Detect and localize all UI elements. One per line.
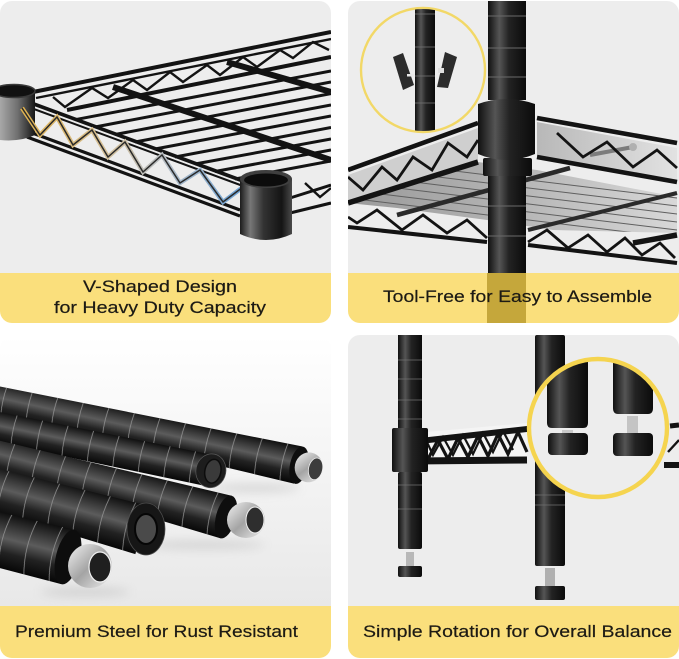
right post with foot <box>535 335 565 600</box>
caption band <box>0 606 331 658</box>
caption: tool-free: Tool-Free for Easy to Assemble <box>383 287 652 306</box>
caption band <box>348 273 679 323</box>
wire shelf grid <box>33 32 331 213</box>
caption: V-shaped design <box>54 277 267 317</box>
rod 1 <box>0 386 322 484</box>
rod 5 <box>0 513 82 584</box>
detail: collapsed foot <box>547 362 588 455</box>
right corner sleeve <box>240 170 292 240</box>
caption band <box>0 273 331 323</box>
caption band <box>348 606 679 658</box>
detail circle: adjustable feet <box>529 350 667 497</box>
caption: premium steel: Premium Steel for Rust Resistant <box>15 622 298 641</box>
left post with foot <box>392 335 428 577</box>
panel: V-shaped design <box>0 1 331 323</box>
front rails <box>23 100 243 216</box>
caption: simple rotation: Simple Rotation for Overall Balance <box>363 622 672 641</box>
highlighted V-shaped zigzag wire <box>22 108 243 202</box>
rod 3 <box>0 440 237 538</box>
post showing through the caption band <box>487 273 526 323</box>
panel: premium steel <box>0 386 331 658</box>
left corner sleeve <box>0 84 35 140</box>
detail circle: snap-on clips <box>361 8 485 134</box>
main post with collar <box>478 0 535 273</box>
caption: V-shaped design: for Heavy Duty Capacity <box>54 298 267 317</box>
detail: extended foot <box>613 363 653 456</box>
connecting shelf rail <box>415 423 679 465</box>
panel: tool-free assembly <box>348 0 679 323</box>
soft shadows under rods <box>40 484 300 596</box>
shelf plate seen through <box>348 122 677 238</box>
shelf rails and zigzag wires <box>348 118 677 263</box>
rod 4 <box>0 470 140 554</box>
panel: simple rotation <box>348 335 679 658</box>
icon: left clip <box>393 53 414 90</box>
icon: right clip <box>437 52 457 88</box>
caption: V-shaped design: V-Shaped Design <box>83 277 237 296</box>
rod 2 <box>0 408 229 490</box>
